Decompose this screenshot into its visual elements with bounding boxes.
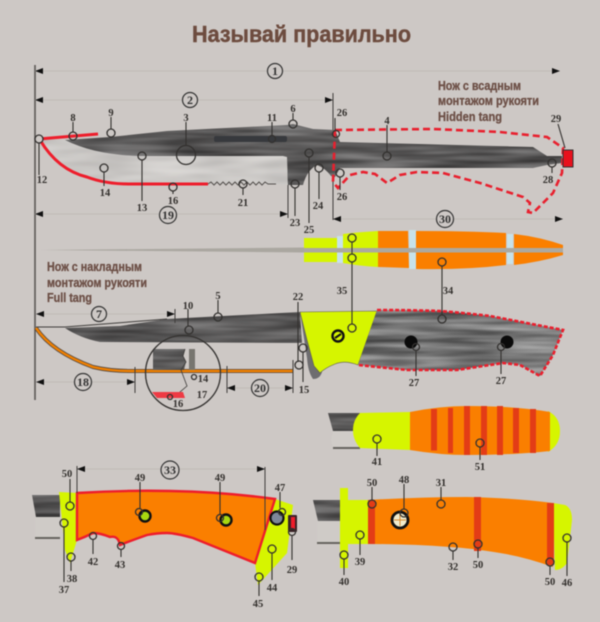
callouts: bottom-right handle: 50 [545,577,555,588]
bolster screw [332,330,344,342]
yellow bolster left [59,492,77,563]
orange scale [77,491,275,563]
callouts: hidden tang knife: 3 [183,113,189,124]
needle blade [40,248,304,252]
blade and tang steel [65,124,562,185]
callouts: hidden tang knife: 12 [37,175,47,186]
tang rod [304,248,563,252]
dimension 19: cutting edge length [35,156,288,224]
heading: full tang [47,260,147,305]
bottom-left knife handle scale [32,491,297,585]
callouts: full tang knife: 27 [409,378,419,389]
callouts: hidden tang knife: 21 [238,198,248,209]
callouts: bottom-left handle: 42 [88,557,98,568]
guard [340,488,348,568]
callouts: bottom-right handle: 50 [367,478,377,489]
tang tail [300,312,322,379]
callouts: hidden tang knife: 8 [70,113,76,124]
detail circle: edge close-up [146,336,220,410]
detail circle: edge close-up: 16 [173,399,183,410]
bolster yellow [300,311,377,373]
callouts: full tang knife: 15 [299,385,309,396]
detail circle: edge close-up: 14 [198,374,209,385]
orange grip [410,406,550,455]
callouts: bottom-left handle: 29 [287,565,297,576]
fuller [214,136,287,142]
callouts: hidden tang knife: 29 [551,114,561,125]
title: Называй правильно [192,21,411,47]
callouts: bottom-right handle: 40 [339,577,349,588]
striped handle [328,406,560,473]
callouts: hidden tang knife: 9 [108,108,114,119]
full tang knife [36,310,563,379]
yellow butt [553,503,572,570]
dimension 30: tang length: 30 [439,212,451,226]
callouts: full tang knife: 35 [337,286,347,297]
callouts: hidden tang knife: 23 [290,218,300,229]
rivet holes [404,336,418,348]
callouts: bottom-left handle [59,469,297,610]
yellow handle parts [304,238,337,262]
callouts: hidden tang knife: 26 [337,108,347,119]
dimension 30: tang length [333,93,563,228]
callouts: bottom-left handle: 38 [67,574,77,585]
bolts [140,510,150,522]
callouts: full tang knife: 10 [183,301,193,312]
striped handle: 41 [372,457,382,468]
callouts: hidden tang knife: 24 [313,201,324,212]
callouts: bottom-right handle: 39 [355,557,365,568]
detail circle: edge close-up: 17 [197,390,207,401]
callouts: bottom-right handle [339,475,572,589]
callouts: bottom-right handle: 48 [399,475,409,486]
blade stub [35,517,60,538]
callouts: bottom-right handle: 50 [473,560,483,571]
pommel nut [563,150,573,167]
yellow butt right [255,499,293,585]
dimension 18: belly [36,367,135,393]
callouts: bottom-right handle: 46 [562,578,572,589]
compass bolt [392,512,408,528]
spacers [337,236,343,263]
callouts: full tang knife: 34 [443,286,454,297]
callouts: hidden tang knife: 6 [290,104,296,115]
heading: full tang: монтажом рукояти [47,276,147,290]
hidden tang knife [39,124,573,213]
callouts: hidden tang knife: 4 [384,116,390,127]
callouts: bottom-left handle: 50 [62,469,72,480]
yellow bolster [348,500,368,544]
blade stub [317,521,340,544]
heading: hidden tang: монтажом рукояти [438,94,539,108]
heading: hidden tang: Hidden tang [438,110,502,124]
rod tang knife with segmented handle [40,230,563,269]
dimension 2: blade length: 2 [187,93,193,107]
callouts: bottom-right handle: 31 [436,478,446,489]
dimension 20: flat edge [227,360,293,396]
callouts: hidden tang knife: 26 [337,192,347,203]
dimension 1: overall length [35,64,560,78]
dimension 1: overall length: 1 [272,64,278,78]
callouts [377,443,480,460]
dimension 19: cutting edge length: 19 [162,208,174,222]
wood handle scale [358,310,563,376]
blade light bevel [40,139,288,185]
callouts: bottom-left handle: 45 [253,599,263,610]
spacer stripes [368,497,554,565]
bottom-right knife handle [313,488,572,570]
dimension 7: swage: 7 [96,307,102,321]
callouts: full tang knife [183,234,506,396]
callouts: full tang knife: 5 [215,291,221,302]
pommel nut [288,515,297,532]
dimension 18: belly: 18 [77,375,89,389]
edge line [36,328,293,371]
callouts: hidden tang knife: 13 [137,203,147,214]
callouts: bottom-left handle: 43 [115,560,125,571]
striped handle: 51 [475,462,485,473]
yellow bolster and butt [353,412,410,450]
callouts: bottom-left handle: 49 [135,473,145,484]
callouts: hidden tang knife [35,104,565,236]
callouts: hidden tang knife: 11 [267,113,277,124]
callouts: bottom-left handle: 49 [215,473,225,484]
orange grip [368,497,553,567]
spine and edge in red [39,134,98,139]
callouts: bottom-right handle: 32 [448,562,458,573]
heading: full tang: Full tang [47,291,92,305]
stripes [431,406,536,455]
callouts: full tang knife: 27 [496,376,506,387]
heading: full tang: Нож с накладным [47,260,142,274]
callouts: hidden tang knife: 16 [168,196,178,207]
callouts: hidden tang knife: 14 [100,188,111,199]
hidden tang handle outline [333,129,563,213]
callouts: bottom-left handle: 37 [59,585,69,596]
lanyard hole [270,512,284,524]
blade stub [331,431,360,448]
dimension 33 [77,461,265,530]
left datum line [34,65,36,400]
callouts: full tang knife: 22 [293,292,303,303]
spine tip [36,319,167,327]
callouts: bottom-left handle: 44 [267,583,278,594]
callouts: bottom-left handle: 47 [275,483,285,494]
heading: hidden tang [438,79,539,124]
dimension 2: blade length [35,92,333,108]
dimension 7: swage [36,306,175,323]
blade steel [65,312,302,343]
heading: hidden tang: Нож с всадным [438,79,521,93]
dimension 20: flat edge: 20 [254,381,266,395]
serrations [208,182,276,185]
callouts: hidden tang knife: 25 [304,225,314,236]
dimension 33: 33 [164,463,176,477]
callouts: hidden tang knife: 28 [543,175,553,186]
orange handle parts [378,231,409,268]
